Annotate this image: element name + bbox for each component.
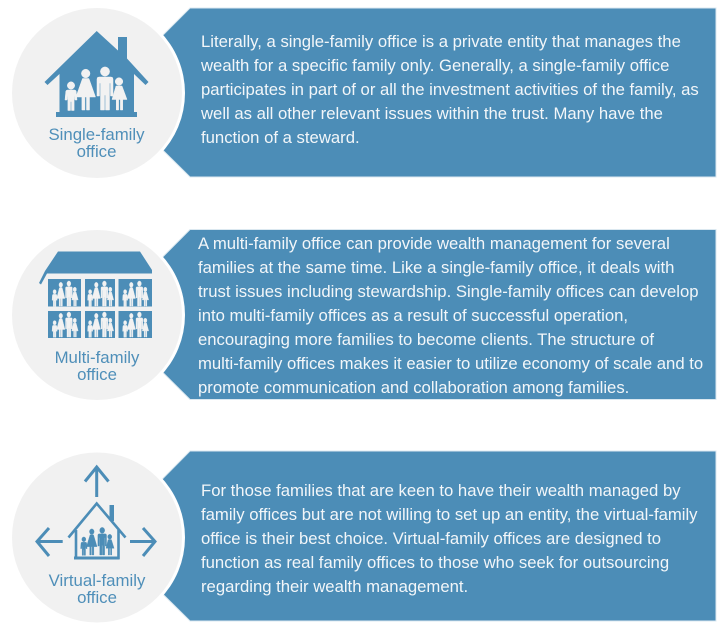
arrow: up	[85, 466, 108, 497]
label: single-family office: office	[77, 142, 116, 161]
text: virtual-family description: For those families that are keen to have their wealth managed by	[201, 481, 681, 500]
text: single-family description: wealth for a specific family only. Generally, a single-family office	[200, 56, 669, 75]
panel: single-family description	[105, 8, 716, 177]
text: single-family description: well as all other relevant issues within the trust. Many have the	[200, 104, 663, 123]
text: multi-family description: A multi-family office can provide wealth management for several	[198, 234, 670, 253]
icon: outline house with family	[68, 504, 126, 560]
panel: virtual-family description	[105, 451, 716, 621]
text: virtual-family description: family offices but are not willing to set up an entity, the virtual-family	[201, 505, 698, 524]
label: virtual-family office: Virtual-family	[49, 571, 146, 590]
label: single-family office: Single-family	[48, 125, 145, 144]
text: multi-family description: trust issues including stewardship. Single-family offices can develop	[198, 282, 699, 301]
text: single-family description: participates in part of or all the investment activities of the family, as	[201, 80, 699, 99]
icon: apartment building with families	[39, 252, 152, 338]
text: multi-family description: into multi-family offices as a result of successful operation,	[198, 306, 628, 325]
text: virtual-family description: regarding their wealth management.	[201, 577, 468, 596]
text: multi-family description: multi-family offices makes it easier to utilize economy of scale and to	[198, 354, 703, 373]
text: multi-family description: promote communication and collaboration among families.	[198, 378, 629, 397]
arrow: right	[130, 528, 155, 556]
text: multi-family description: families at the same time. Like a single-family office, it deals with	[198, 258, 674, 277]
badge: virtual-family office	[9, 450, 185, 626]
text: single-family description: function of a steward.	[201, 128, 360, 147]
label: virtual-family office: office	[77, 588, 117, 607]
badge: multi-family office	[9, 227, 185, 403]
label: multi-family office: office	[77, 365, 117, 384]
label: multi-family office: Multi-family	[55, 348, 140, 367]
text: single-family description: Literally, a single-family office is a private entity that manages the	[201, 32, 681, 51]
text: virtual-family description: function as real family offices to those who seek for outsourcing	[201, 553, 669, 572]
text: multi-family description: encouraging more families to become clients. The structure of	[198, 330, 654, 349]
text: virtual-family description: office is their best choice. Virtual-family offices are designed to	[201, 529, 661, 548]
icon: house with family	[44, 31, 148, 117]
panel: multi-family description	[105, 230, 716, 400]
badge: single-family office	[9, 5, 185, 181]
arrow: left	[37, 528, 63, 556]
